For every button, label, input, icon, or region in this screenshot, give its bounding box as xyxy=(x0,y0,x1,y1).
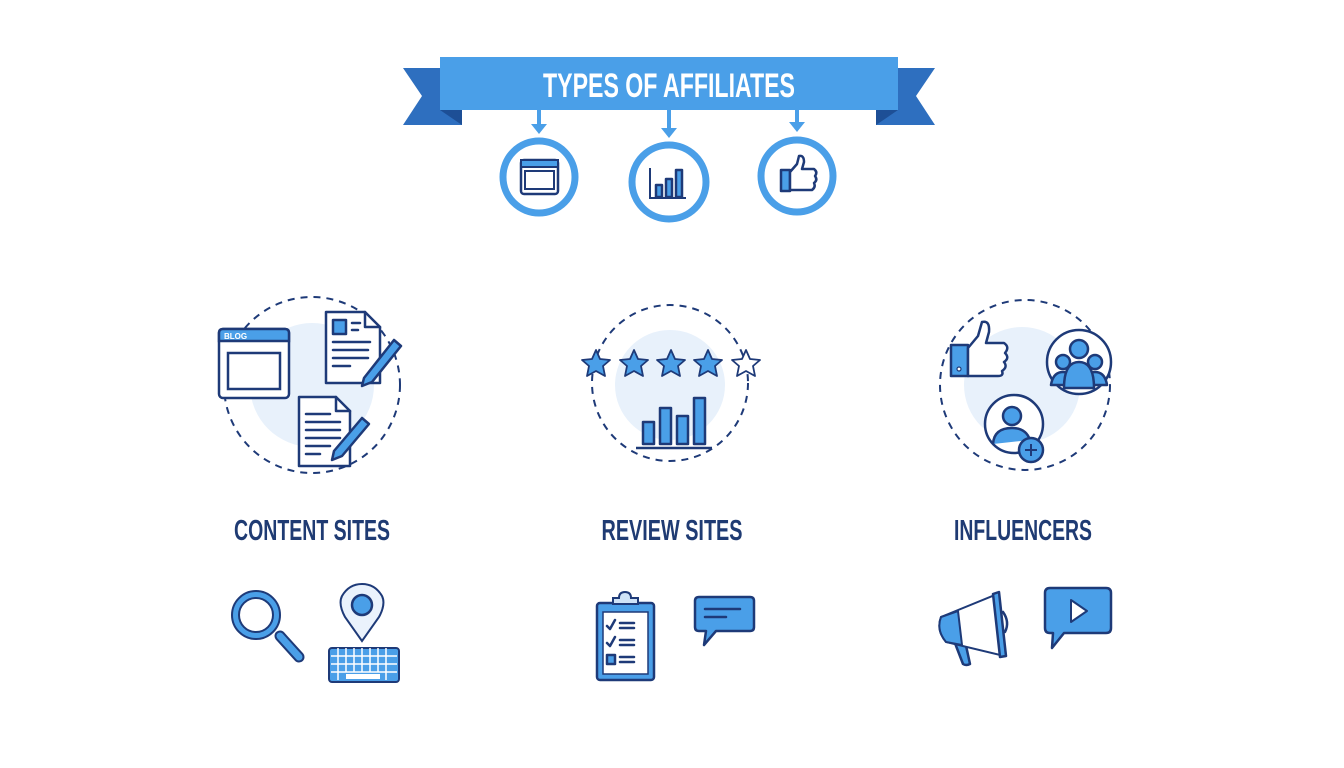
heading: influencers: INFLUENCERS xyxy=(954,515,1092,547)
panel: content sites xyxy=(219,297,401,473)
icon: clipboard xyxy=(597,592,654,680)
icon: thumbs up xyxy=(951,322,1007,376)
icon: document with pen 2 xyxy=(299,397,369,466)
icon: magnifier xyxy=(232,591,299,657)
title banner xyxy=(403,57,935,125)
icon: top browser xyxy=(503,141,575,213)
icon: pin and keyboard xyxy=(329,584,399,682)
heading: content sites: CONTENT SITES xyxy=(234,515,390,547)
icon: document with pen 1 xyxy=(326,312,401,386)
icon: video bubble xyxy=(1045,588,1111,648)
icon: add user xyxy=(985,395,1043,462)
icon: blog window: BLOG xyxy=(224,332,247,341)
icon: megaphone xyxy=(939,592,1007,665)
title banner: TYPES OF AFFILIATES xyxy=(543,67,795,105)
arrows from banner xyxy=(531,110,805,138)
icon: stars xyxy=(582,350,760,376)
panel: influencers xyxy=(940,300,1111,470)
icon: group avatar xyxy=(1047,330,1111,394)
icon: top bar chart xyxy=(632,145,706,219)
icon: top thumbs up xyxy=(761,140,833,212)
icon: bar chart xyxy=(636,398,712,448)
heading: review sites: REVIEW SITES xyxy=(602,515,742,547)
panel: review sites xyxy=(582,305,760,461)
icon: blog window xyxy=(219,329,289,398)
icon: chat bubble xyxy=(695,597,754,645)
